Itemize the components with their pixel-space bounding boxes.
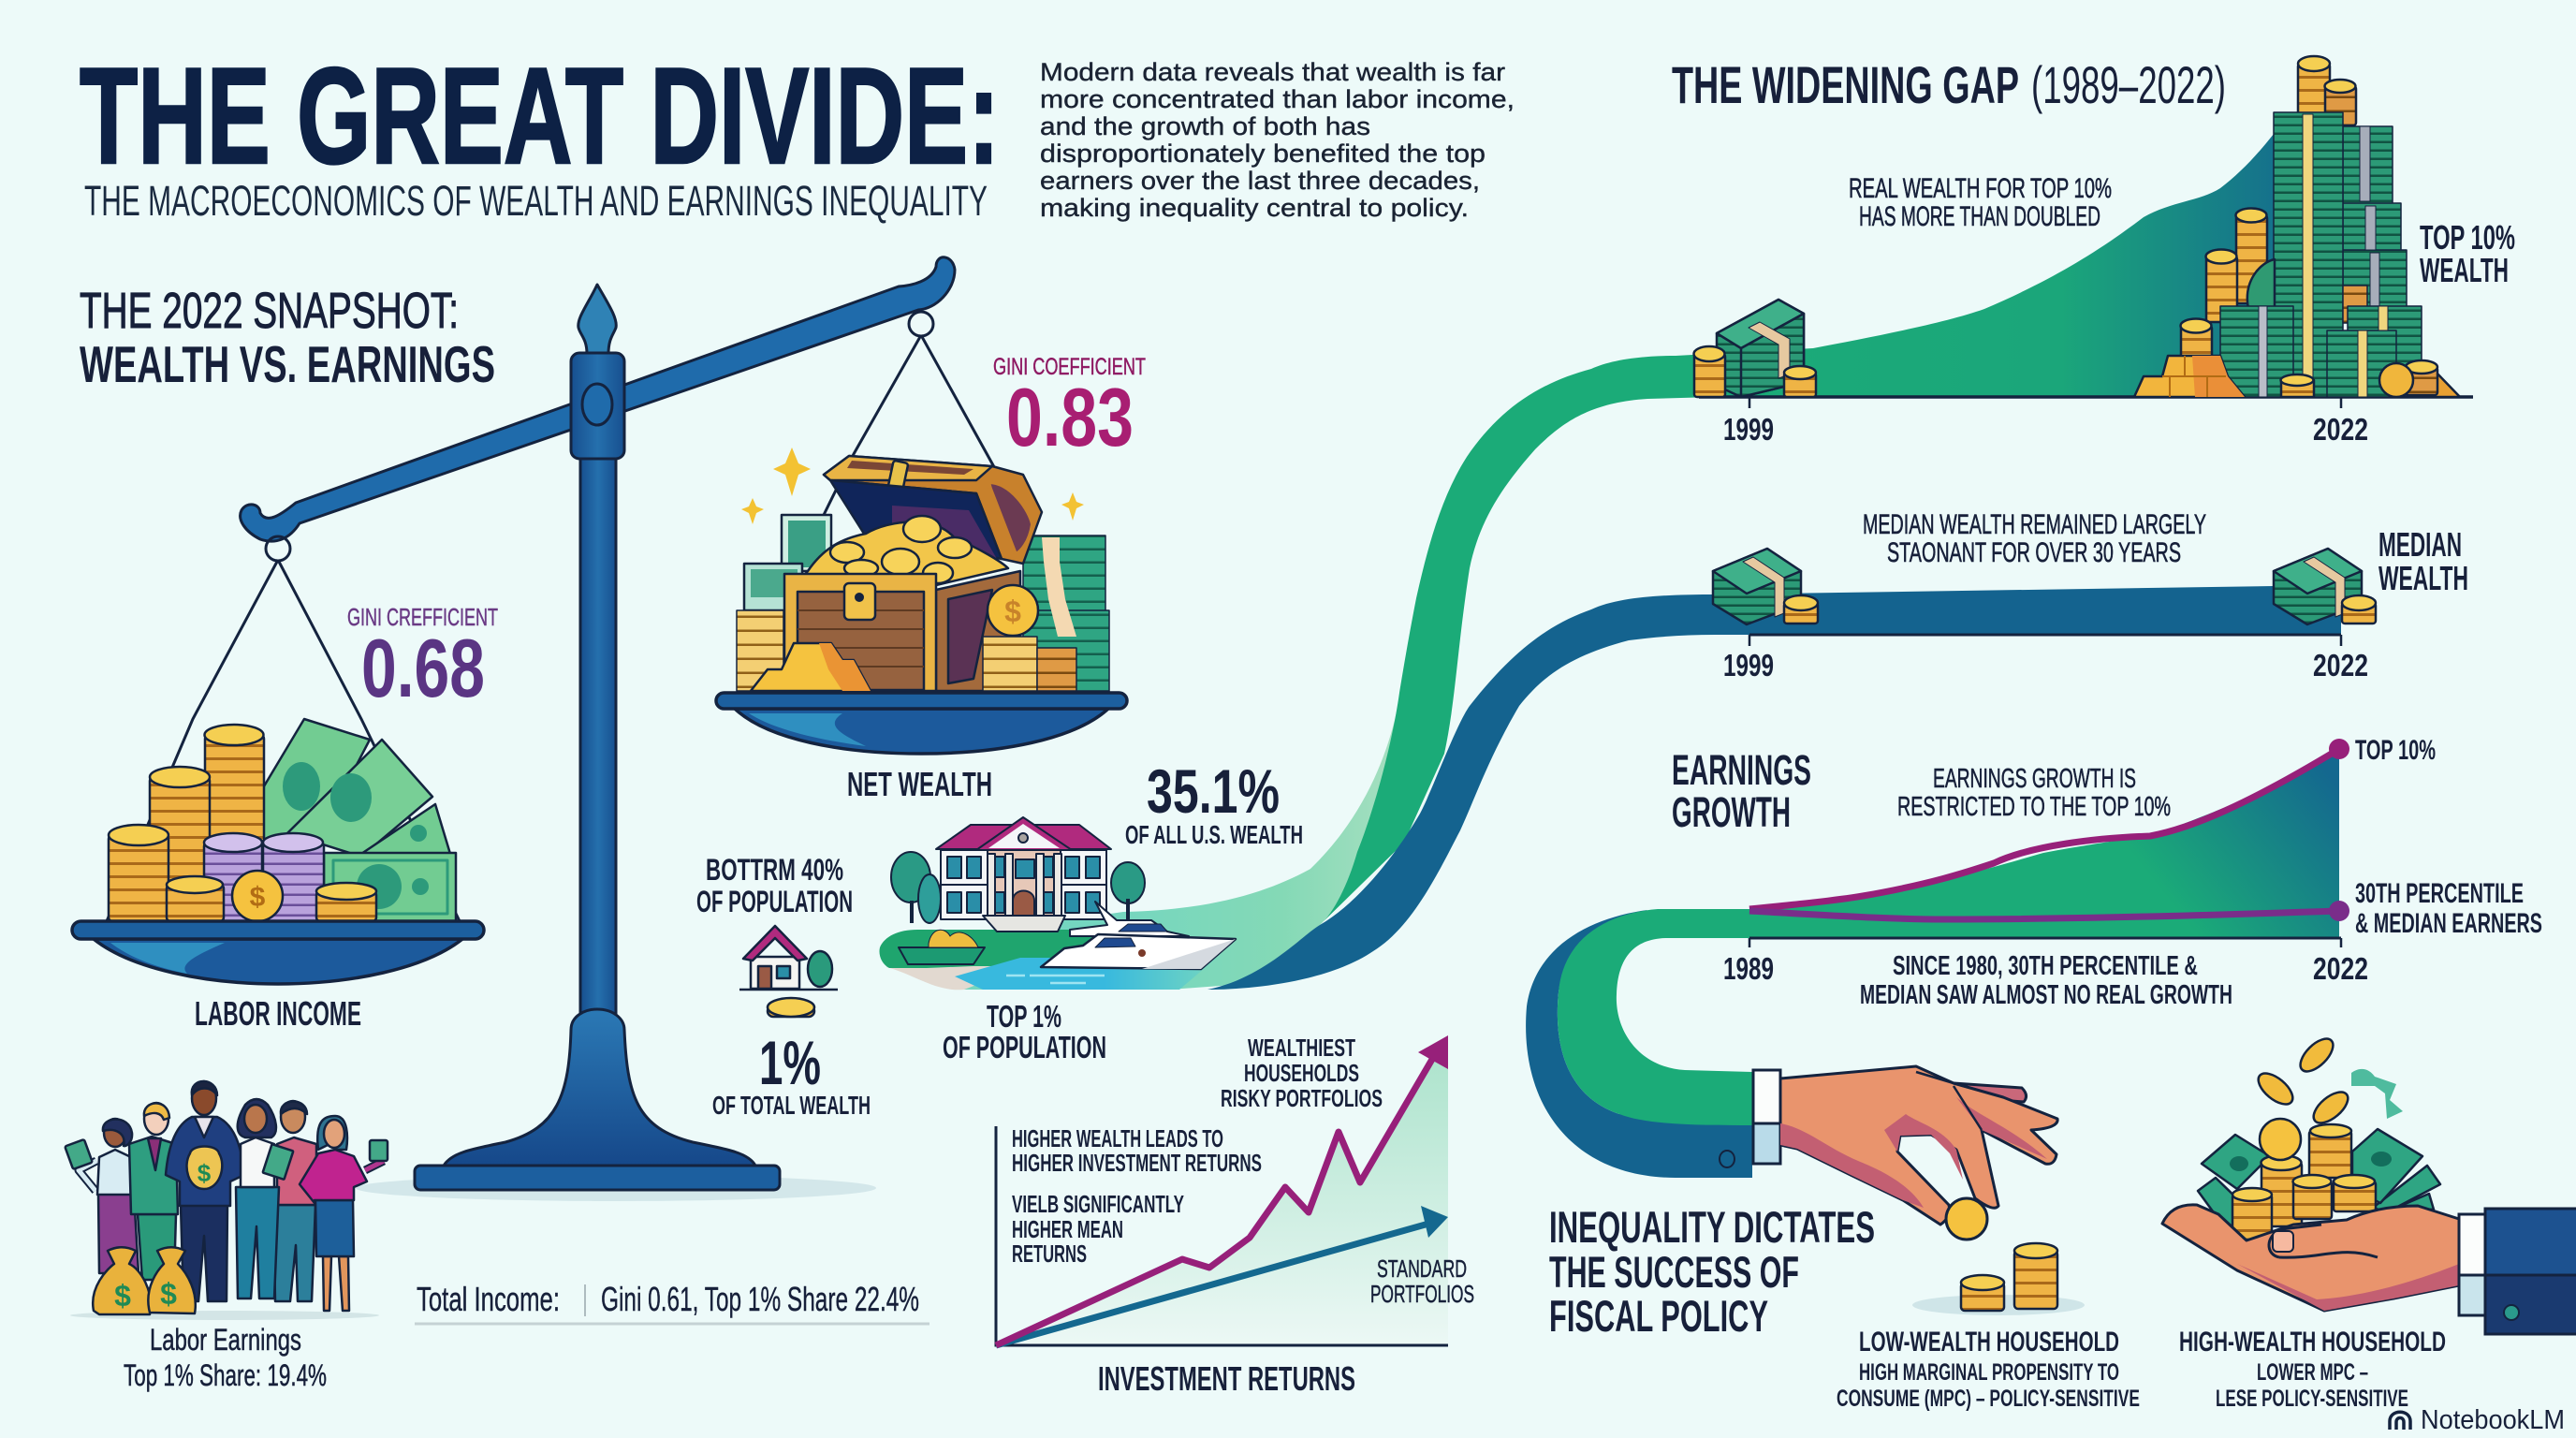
label: labor earnings xyxy=(124,1323,327,1392)
label: top 10 percent wealth: TOP 10% xyxy=(2420,218,2515,257)
heading: fiscal policy: THE SUCCESS OF xyxy=(1549,1247,1799,1297)
annotation: higher returns: HIGHER WEALTH LEADS TO xyxy=(1012,1124,1223,1152)
icon: open hand with wealth xyxy=(2162,1034,2576,1334)
label: 2022 earnings: 2022 xyxy=(2313,951,2368,986)
icon: cash and coins xyxy=(109,719,456,921)
icon: small house and coin xyxy=(739,926,838,1017)
axis: top wealth xyxy=(1699,397,2473,408)
panel: distribution xyxy=(696,756,1303,1120)
group: net wealth pan xyxy=(716,354,1146,803)
label: top 10 percent wealth: WEALTH xyxy=(2420,251,2509,289)
label: top 10 percent wealth xyxy=(2420,218,2515,289)
annotation: no real growth: SINCE 1980, 30TH PERCENTILE & xyxy=(1893,951,2198,981)
annotation: mean returns: HIGHER MEAN xyxy=(1012,1215,1123,1243)
chart: earnings area xyxy=(1749,749,2339,937)
panel: balance scale xyxy=(72,257,1146,1201)
ribbon: U-turn green xyxy=(1558,909,1752,1125)
label: net wealth: NET WEALTH xyxy=(847,765,992,803)
panel: investment returns xyxy=(996,1034,1474,1398)
label: 30th percentile and median xyxy=(2355,878,2542,939)
label: top 1 percent xyxy=(943,999,1106,1064)
panel: widening gap xyxy=(1672,55,2515,682)
icon: mansion and yacht xyxy=(879,817,1236,990)
annotation: mean returns: RETURNS xyxy=(1012,1240,1087,1268)
annotation: median wealth xyxy=(1863,509,2206,568)
label: low-wealth household xyxy=(1837,1327,2140,1412)
axes xyxy=(996,1126,1448,1345)
annotation: mean returns: VIELB SIGNIFICANTLY xyxy=(1012,1190,1184,1218)
annotation: real wealth xyxy=(1849,173,2112,232)
label: 1989: 1989 xyxy=(1723,951,1774,986)
icon: 2022 money tower xyxy=(2134,56,2460,397)
label: 1 percent: 1% xyxy=(759,1028,821,1097)
heading: 2022 snapshot: WEALTH VS. EARNINGS xyxy=(80,335,495,393)
label: 1 percent: OF TOTAL WEALTH xyxy=(712,1091,871,1120)
ribbon: mint top 1 percent xyxy=(955,688,1401,990)
label: bottom 40 percent: OF POPULATION xyxy=(696,885,853,918)
label: 1 percent xyxy=(712,1028,871,1120)
icon: pinching hand xyxy=(1720,1066,2057,1240)
panel: flowing ribbons xyxy=(955,112,2341,990)
annotation: real wealth: REAL WEALTH FOR TOP 10% xyxy=(1849,173,2112,204)
intro paragraph: making inequality central to policy. xyxy=(1040,194,1469,222)
chart: median wealth band xyxy=(1208,584,2341,990)
intro paragraph: Modern data reveals that wealth is far xyxy=(1040,58,1505,86)
label: total income: Total Income: xyxy=(417,1280,560,1318)
heading: 2022 snapshot: THE 2022 SNAPSHOT: xyxy=(80,283,459,339)
label: median wealth: MEDIAN xyxy=(2378,525,2462,564)
heading: widening gap: (1989–2022) xyxy=(2031,55,2226,114)
heading: investment returns: INVESTMENT RETURNS xyxy=(1098,1359,1355,1398)
label: total income xyxy=(415,1280,929,1324)
label: gini 0.83: GINI COEFFICIENT xyxy=(993,354,1146,380)
annotation: real wealth: HAS MORE THAN DOUBLED xyxy=(1859,201,2100,232)
annotation: higher returns xyxy=(1012,1124,1262,1177)
label: 2022: 2022 xyxy=(2313,412,2368,447)
icon: 1999 money stack xyxy=(1694,300,1816,397)
label: wealthiest households xyxy=(1221,1034,1383,1112)
label: gini 0.68: 0.68 xyxy=(361,622,485,714)
label: wealthiest households: RISKY PORTFOLIOS xyxy=(1221,1084,1383,1112)
panel: fiscal policy xyxy=(1549,1034,2576,1412)
label: high-wealth household: HIGH-WEALTH HOUSEHOLD xyxy=(2179,1327,2446,1357)
intro paragraph xyxy=(1040,58,1515,222)
heading: earnings growth xyxy=(1672,746,1811,836)
annotation: median wealth: STAONANT FOR OVER 30 YEARS xyxy=(1887,537,2181,568)
icon: group of labor earners: $ xyxy=(198,1159,212,1187)
chart: shaded area xyxy=(996,1035,1448,1345)
label: gini 0.68 xyxy=(347,603,498,714)
annotation: no real growth xyxy=(1860,951,2232,1010)
logo: NotebookLM: NotebookLM xyxy=(2421,1405,2565,1435)
icon: low-wealth coin stacks xyxy=(1912,1243,2085,1315)
annotation: higher returns: HIGHER INVESTMENT RETURNS xyxy=(1012,1149,1262,1177)
icon: group of labor earners xyxy=(65,1081,388,1320)
icon: cash and coins: $ xyxy=(250,882,266,913)
icon: sparkles xyxy=(741,448,1084,524)
icon: scale ropes xyxy=(107,335,1109,921)
annotation: restricted growth: RESTRICTED TO THE TOP 10% xyxy=(1897,792,2171,822)
label: high-wealth household: LOWER MPC – xyxy=(2257,1359,2368,1386)
chart: top 10 percent wealth area xyxy=(1320,112,2340,925)
heading: 2022 snapshot xyxy=(80,283,495,393)
icon: group of labor earners: $ xyxy=(160,1277,177,1311)
label: high-wealth household xyxy=(2179,1327,2446,1412)
label: low-wealth household: HIGH MARGINAL PROPENSITY TO xyxy=(1859,1359,2119,1386)
label: total income: Gini 0.61, Top 1% Share 22.4% xyxy=(601,1280,919,1318)
annotation: mean returns xyxy=(1012,1190,1184,1268)
annotation: no real growth: MEDIAN SAW ALMOST NO REAL GROWTH xyxy=(1860,980,2232,1010)
annotation: median wealth: MEDIAN WEALTH REMAINED LARGELY xyxy=(1863,509,2206,540)
heading: earnings growth: EARNINGS xyxy=(1672,746,1811,794)
label: gini 0.83: 0.83 xyxy=(1006,371,1134,463)
intro paragraph: disproportionately benefited the top xyxy=(1040,139,1486,168)
label: top 1 percent: TOP 1% xyxy=(987,999,1061,1034)
label: top 10 percent: TOP 10% xyxy=(2355,735,2436,766)
icon: group of labor earners: $ xyxy=(114,1279,131,1313)
annotation: restricted growth xyxy=(1897,764,2171,822)
label: median wealth: WEALTH xyxy=(2378,559,2468,597)
icon: median 2022 money xyxy=(2274,549,2376,624)
ribbon: U-turn blue sleeve xyxy=(1526,910,1752,1178)
heading: fiscal policy: INEQUALITY DICTATES xyxy=(1549,1202,1875,1252)
label: high-wealth household: LESE POLICY-SENSITIVE xyxy=(2216,1386,2408,1412)
label: 1999: 1999 xyxy=(1723,412,1774,447)
intro paragraph: more concentrated than labor income, xyxy=(1040,85,1515,113)
subtitle: THE MACROECONOMICS OF WEALTH AND EARNINGS INEQUALITY xyxy=(84,177,988,225)
icon: scale column xyxy=(356,285,876,1201)
label: standard portfolios: STANDARD xyxy=(1377,1255,1467,1283)
icon: scale beam xyxy=(241,257,955,561)
icon: left pan xyxy=(72,921,484,984)
intro paragraph: and the growth of both has xyxy=(1040,112,1370,140)
label: median wealth xyxy=(2378,525,2468,597)
heading: fiscal policy xyxy=(1549,1202,1875,1341)
axis: median wealth xyxy=(1749,635,2341,646)
label: bottom 40 percent: BOTTRM 40% xyxy=(706,853,843,887)
label: 35.1 percent: OF ALL U.S. WEALTH xyxy=(1125,820,1303,849)
icon: right pan xyxy=(716,693,1127,754)
icon: treasure chest and cash: $ xyxy=(1004,594,1021,628)
label: wealthiest households: WEALTHIEST xyxy=(1248,1034,1355,1062)
heading: earnings growth: GROWTH xyxy=(1672,788,1791,836)
label: low-wealth household: LOW-WEALTH HOUSEHOLD xyxy=(1859,1327,2119,1357)
label: bottom 40 percent xyxy=(696,853,853,918)
panel: earnings growth xyxy=(1526,735,2542,1178)
icon: median 1999 money xyxy=(1713,549,1818,624)
heading: fiscal policy: FISCAL POLICY xyxy=(1549,1291,1768,1341)
line: risky portfolios xyxy=(996,1035,1448,1345)
label: standard portfolios xyxy=(1370,1255,1474,1308)
label: standard portfolios: PORTFOLIOS xyxy=(1370,1280,1474,1308)
label: 35.1 percent: 35.1% xyxy=(1147,756,1280,826)
label: gini 0.83 xyxy=(993,354,1146,463)
axis: earnings xyxy=(1749,938,2341,947)
label: 35.1 percent xyxy=(1125,756,1303,849)
label: 2022 median: 2022 xyxy=(2313,648,2368,682)
line: standard portfolios xyxy=(996,1206,1448,1345)
label: top 1 percent: OF POPULATION xyxy=(943,1030,1106,1064)
label: gini 0.68: GINI CREFFICIENT xyxy=(347,603,498,631)
label: labor earnings: Top 1% Share: 19.4% xyxy=(124,1358,327,1392)
annotation: restricted growth: EARNINGS GROWTH IS xyxy=(1933,764,2136,794)
icon: treasure chest and cash xyxy=(737,456,1109,691)
group: labor income pan xyxy=(72,603,498,1033)
line: top 10 percent earnings xyxy=(1749,739,2349,909)
label: wealthiest households: HOUSEHOLDS xyxy=(1244,1059,1359,1087)
title: THE GREAT DIVIDE: xyxy=(80,39,1000,192)
label: labor income: LABOR INCOME xyxy=(195,994,361,1033)
heading: widening gap: THE WIDENING GAP xyxy=(1672,55,2019,114)
line: median earnings xyxy=(1749,901,2349,921)
label: low-wealth household: CONSUME (MPC) – POLICY-SENSITIVE xyxy=(1837,1386,2140,1412)
intro paragraph: earners over the last three decades, xyxy=(1040,167,1480,195)
label: labor earnings: Labor Earnings xyxy=(150,1323,301,1357)
label: 1999 median: 1999 xyxy=(1723,648,1774,682)
